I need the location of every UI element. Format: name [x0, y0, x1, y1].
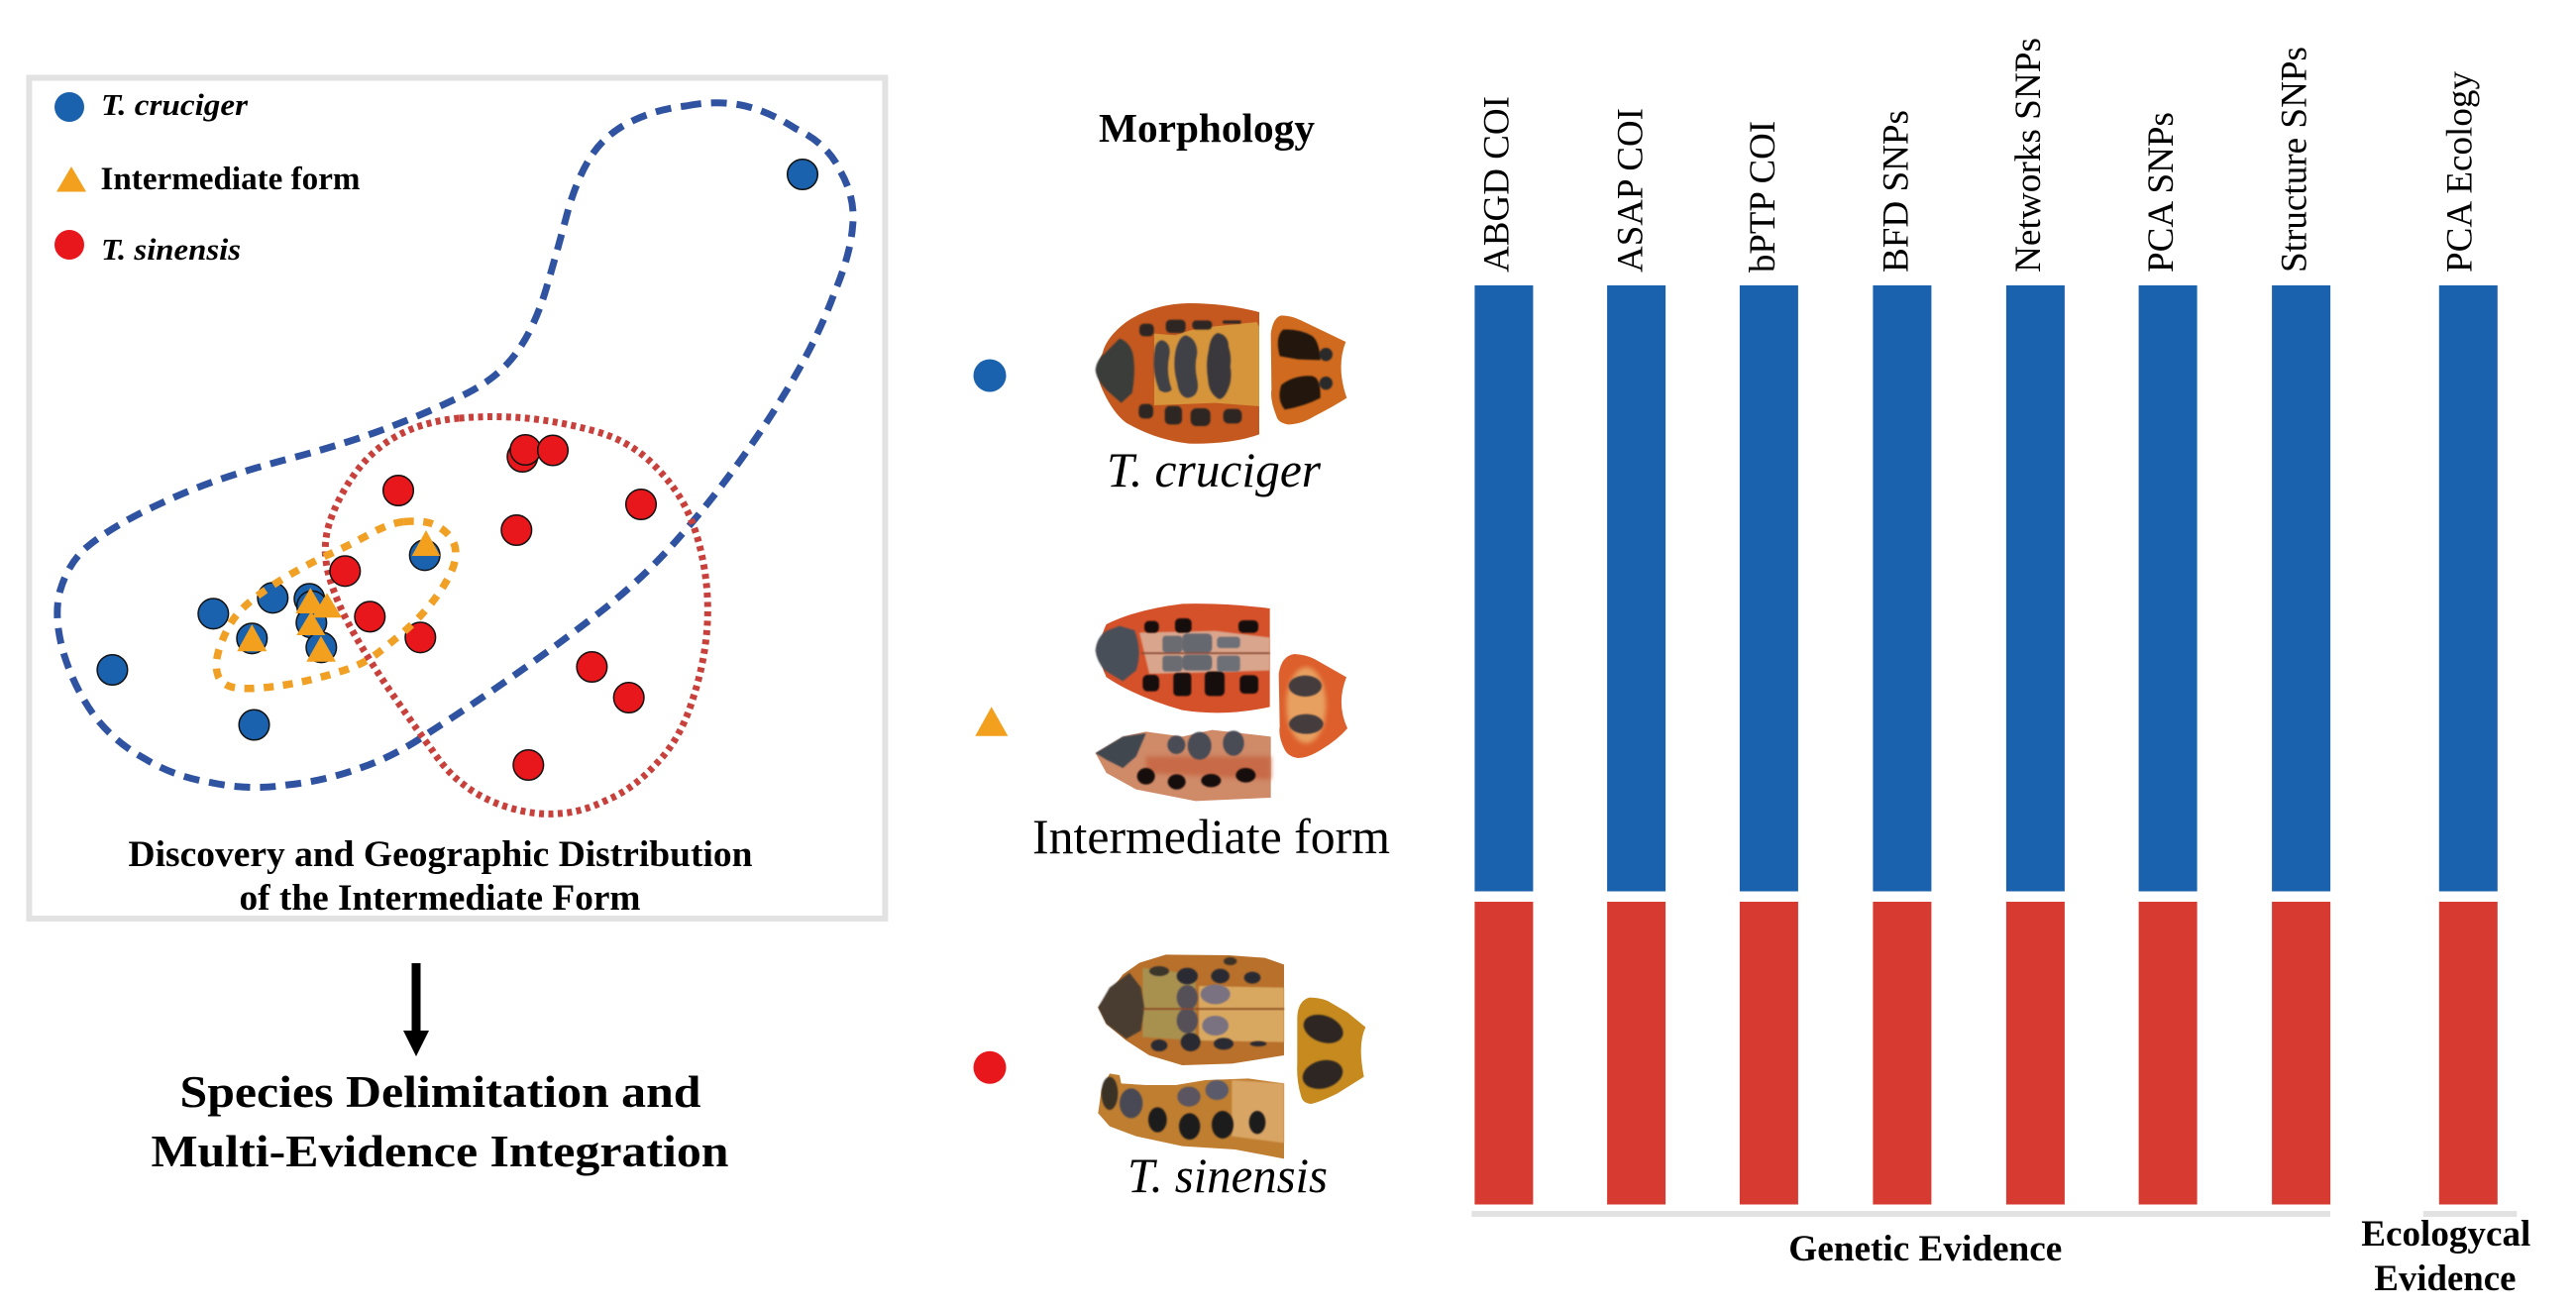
heading: species delimitation	[151, 1066, 729, 1176]
specimen name: T. cruciger	[1107, 442, 1322, 497]
intermediate form sample points	[237, 530, 440, 662]
specimen photo: T. sinensis	[1098, 954, 1365, 1158]
label: ecological evidence: Ecologycal	[2361, 1214, 2530, 1255]
label: genetic evidence: Genetic Evidence	[1788, 1229, 2062, 1269]
column labels: bPTP COI	[1743, 121, 1783, 273]
heading: species delimitation: Species Delimitation and	[180, 1066, 701, 1117]
morphology row: intermediate form	[975, 603, 1390, 864]
panel caption: Discovery and Geographic Distribution	[129, 834, 753, 875]
column labels: ASAP COI	[1611, 108, 1652, 273]
legend: T. cruciger	[101, 87, 249, 122]
bracket: genetic evidence	[1471, 1211, 2330, 1217]
column labels	[1476, 38, 2481, 273]
panel caption	[129, 834, 753, 919]
blue bars: T. cruciger	[1474, 285, 2498, 892]
distribution outline: T. cruciger	[57, 103, 853, 788]
column labels: ABGD COI	[1476, 96, 1518, 273]
column labels: BFD SNPs	[1876, 110, 1916, 273]
specimen photo: T. cruciger	[1096, 303, 1346, 444]
label: ecological evidence: Evidence	[2374, 1258, 2516, 1299]
column labels: PCA SNPs	[2141, 112, 2182, 273]
label: ecological evidence	[2361, 1214, 2530, 1299]
evidence bar chart	[1471, 38, 2530, 1299]
specimen photo: intermediate form	[1096, 603, 1347, 801]
arrow	[403, 963, 429, 1056]
distribution outline: T. sinensis	[325, 416, 707, 814]
icon: red circle	[973, 1051, 1007, 1084]
morphology row: T. cruciger	[973, 303, 1346, 497]
specimen name: Intermediate form	[1032, 809, 1390, 864]
column labels: PCA Ecology	[2439, 71, 2481, 273]
red sample points	[330, 435, 656, 780]
icon: blue circle	[973, 359, 1007, 392]
blue sample points	[97, 160, 817, 740]
legend: Intermediate form	[101, 162, 361, 197]
panel: discovery and geographic distribution map	[29, 77, 885, 919]
legend: T. sinensis	[101, 232, 241, 267]
heading: species delimitation: Multi-Evidence Integration	[151, 1126, 729, 1176]
specimen name: T. sinensis	[1127, 1148, 1328, 1203]
column labels: Networks SNPs	[2008, 38, 2049, 273]
icon: orange triangle	[975, 707, 1008, 736]
column labels: Structure SNPs	[2274, 47, 2314, 273]
panel frame	[29, 77, 885, 919]
red bars: T. sinensis	[1474, 902, 2498, 1205]
distribution outline: intermediate form	[216, 521, 456, 689]
legend	[54, 87, 361, 267]
morphology row: T. sinensis	[973, 954, 1365, 1203]
panel caption: of the Intermediate Form	[240, 878, 641, 919]
bracket: ecological evidence	[2423, 1211, 2517, 1217]
heading: morphology: Morphology	[1099, 105, 1315, 151]
